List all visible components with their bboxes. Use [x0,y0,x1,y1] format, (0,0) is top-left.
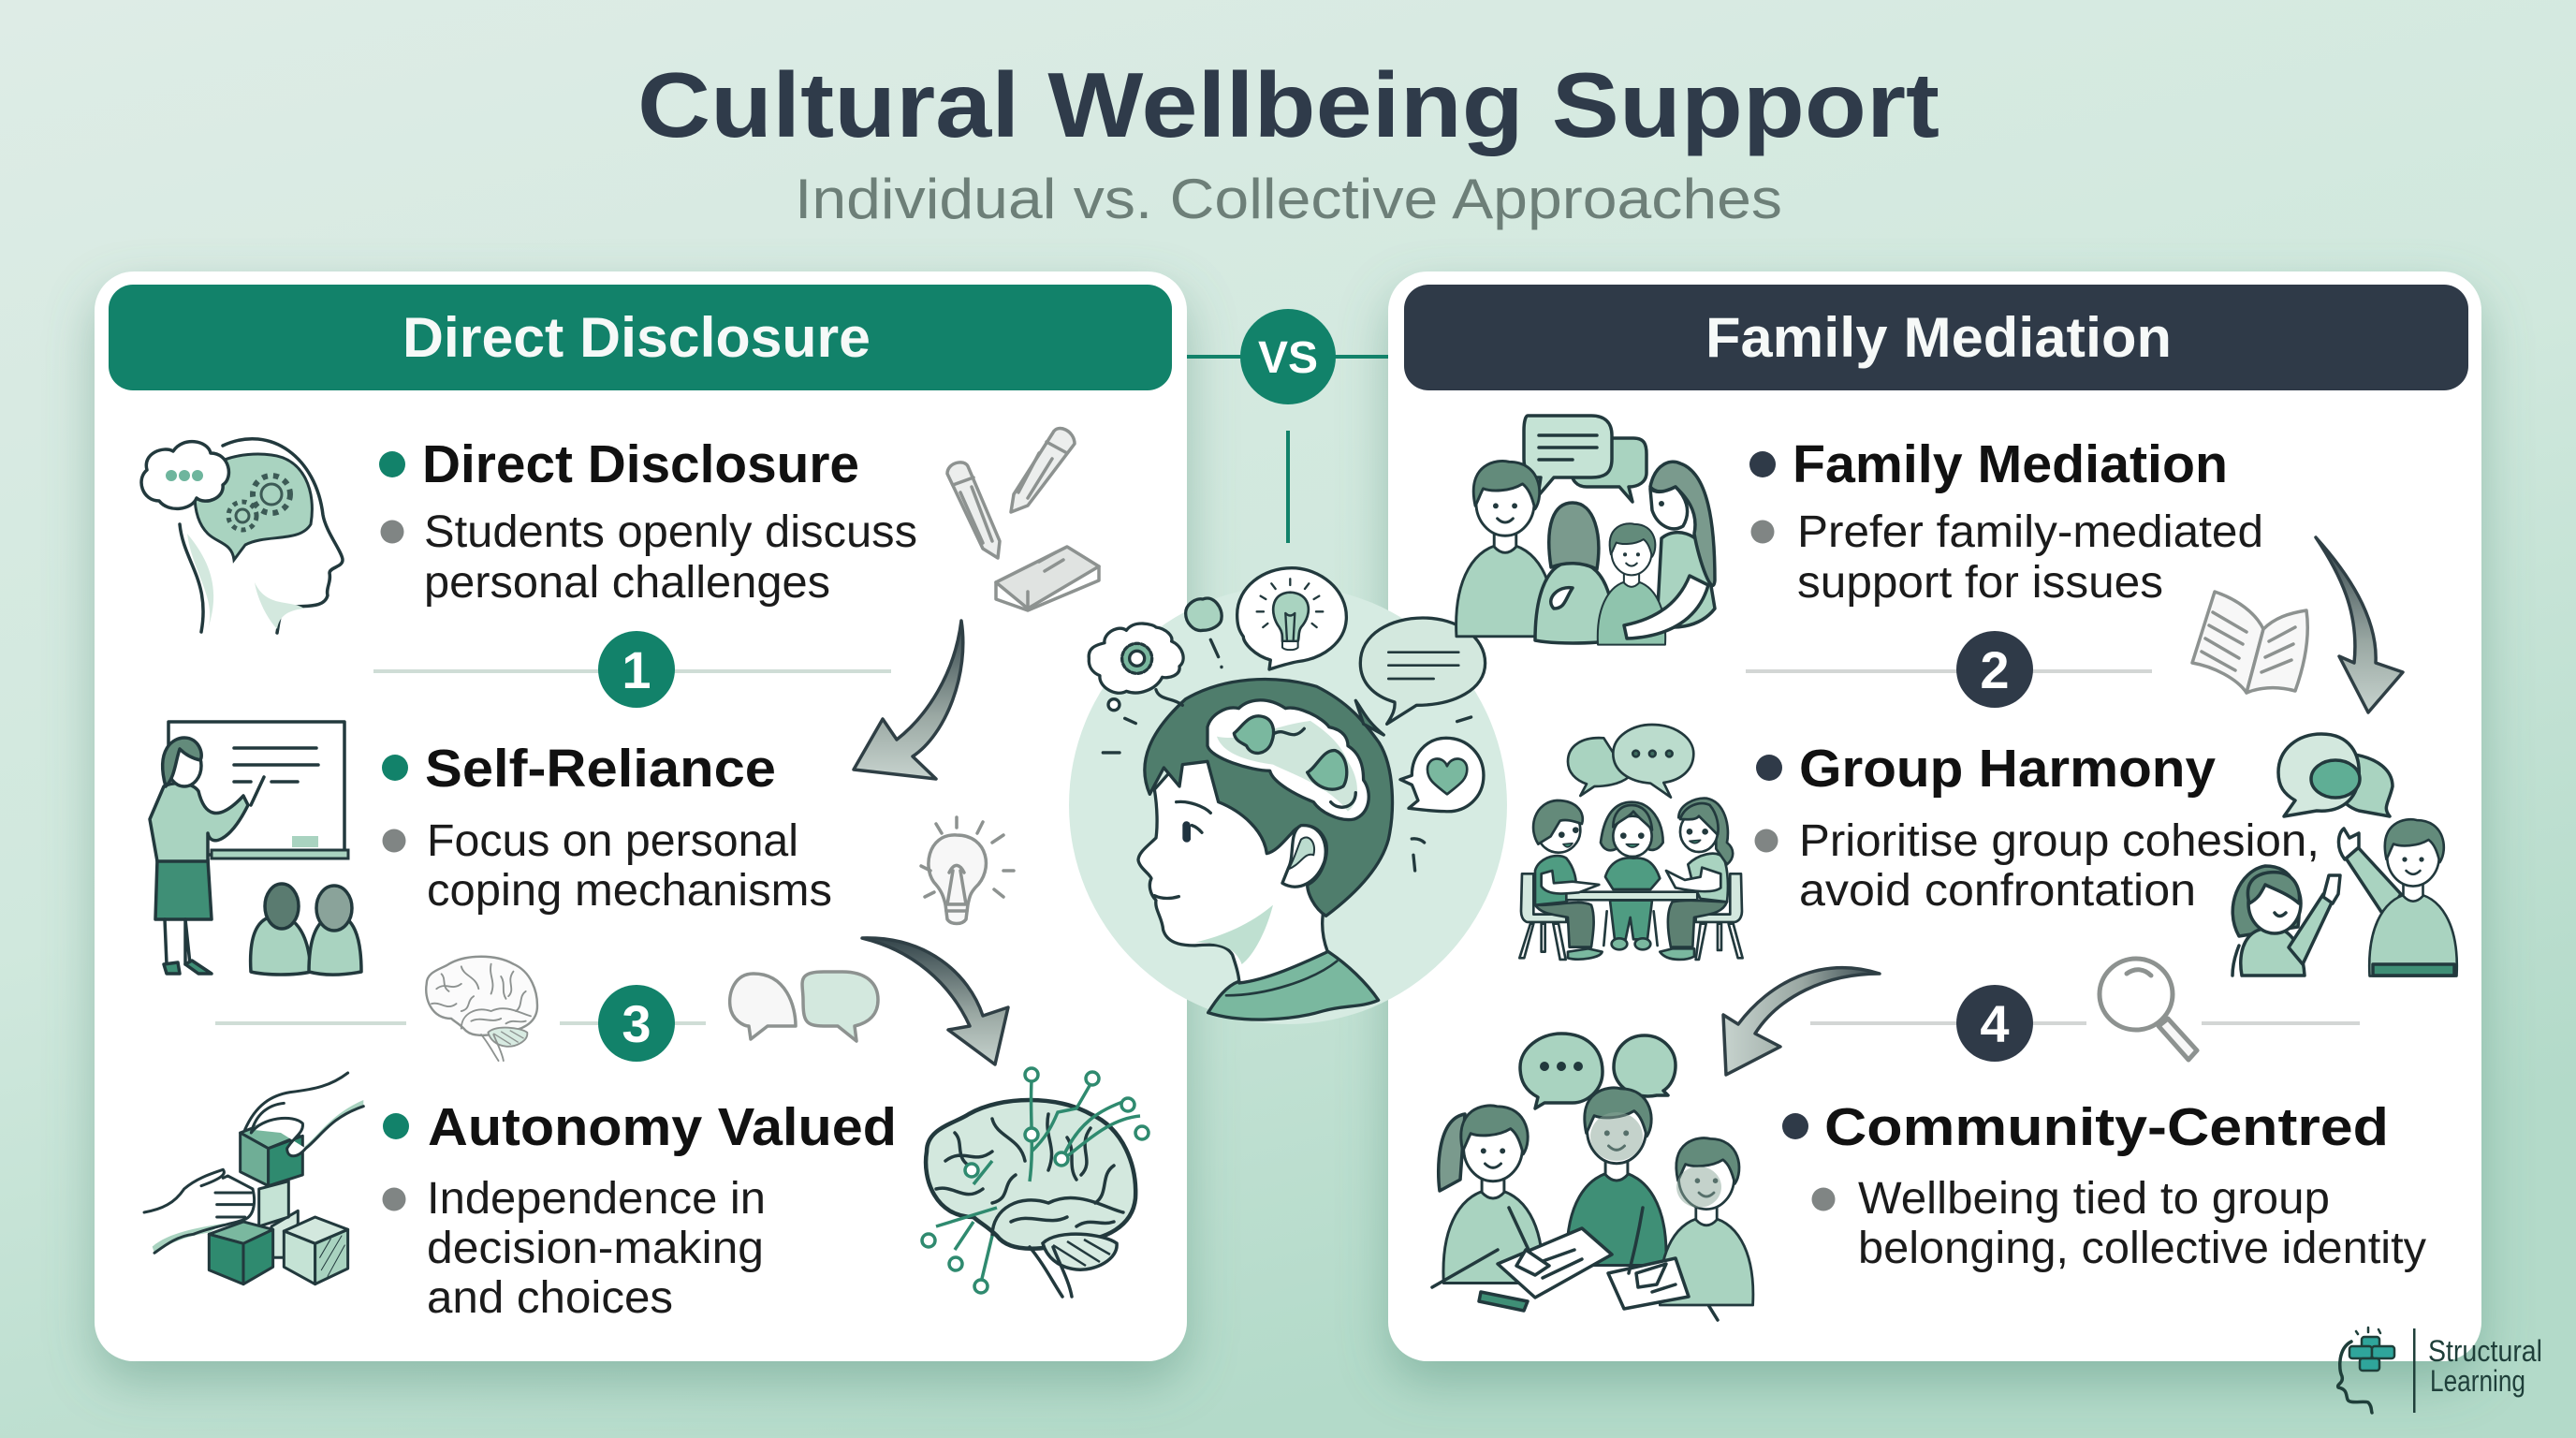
text block: autonomy valued: and choices [427,1273,673,1323]
arrow: family mediation to group harmony [2316,537,2403,712]
header label: direct disclosure: Direct Disclosure [402,306,871,369]
logo: structural learning: Learning [2430,1364,2525,1398]
text block: group harmony [1754,739,2320,916]
icon: grey speech bubbles [730,972,878,1041]
text block: autonomy valued: decision-making [427,1224,764,1273]
text block: direct disclosure: Direct Disclosure [422,434,859,494]
panel: family mediation [1388,271,2481,1361]
number badge 1: 1 [622,640,651,699]
icon: grey open book [2192,592,2307,693]
icon: grey lightbulb [921,817,1014,923]
vs badge [1240,309,1336,404]
text block: self-reliance: Focus on personal [427,816,798,866]
text block: direct disclosure: personal challenges [424,558,830,608]
arrow: group harmony to community-centred [1723,968,1880,1075]
icon: waving children [2232,819,2457,976]
centre illustration: student head with thoughts [1069,568,1507,1024]
text block: family mediation: Prefer family-mediated [1797,507,2263,557]
logo: structural learning [2338,1328,2542,1413]
text block: self-reliance: coping mechanisms [427,866,832,916]
title: Cultural Wellbeing Support [637,53,1939,156]
centre circle [1069,586,1507,1024]
text block: group harmony: Prioritise group cohesion, [1799,816,2320,866]
number badge 3 [598,985,675,1062]
number badge 4: 4 [1980,994,2010,1053]
header bar: direct disclosure [109,285,1172,390]
text block: family mediation: Family Mediation [1793,434,2228,494]
text block: family mediation: support for issues [1797,558,2163,608]
number badge 4 [1956,985,2033,1062]
dividers [215,671,2360,1023]
header label: family mediation: Family Mediation [1705,306,2172,369]
icon: head with thought cloud [141,439,343,633]
icon: family group [1456,416,1715,645]
text block: autonomy valued: Independence in [427,1174,766,1224]
text block: community-centred [1782,1097,2426,1273]
text block: self-reliance [382,739,832,916]
icon: overlapping speech bubbles [2278,734,2393,816]
number badge 1 [598,631,675,708]
icon: large brain with circuits [922,1068,1149,1297]
icon: children at table [1519,725,1743,960]
student [1089,568,1486,1020]
icon: small grey brain [426,957,537,1061]
header bar: family mediation [1404,285,2468,390]
number badge 2: 2 [1980,640,2010,699]
text block: autonomy valued: Autonomy Valued [428,1097,897,1157]
text block: autonomy valued [382,1097,897,1323]
icon: hands and blocks [144,1073,363,1284]
panel: direct disclosure [95,271,1187,1361]
text block: group harmony: avoid confrontation [1799,866,2196,916]
logo: structural learning: Structural [2428,1334,2542,1368]
number badge 3: 3 [622,994,651,1053]
text block: direct disclosure: Students openly discuss [424,507,917,557]
text block: community-centred: Wellbeing tied to group [1858,1174,2330,1224]
vs badge: VS [1258,333,1318,383]
text block: group harmony: Group Harmony [1799,739,2216,799]
text block: self-reliance: Self-Reliance [425,739,776,799]
text block: community-centred: Community-Centred [1824,1097,2389,1157]
icon: pencils and book [947,429,1099,610]
text block: family mediation [1749,434,2263,608]
icon: children studying together [1432,1034,1753,1320]
icon: teacher at whiteboard [150,722,361,975]
text block: community-centred: belonging, collective identity [1858,1224,2426,1273]
number badge 2 [1956,631,2033,708]
vs connector lines [1187,357,1388,543]
icon: magnifying glass [2100,959,2197,1060]
text block: direct disclosure [379,434,917,608]
arrow: self-reliance to autonomy [862,938,1008,1064]
arrow: disclosure to self-reliance [854,621,963,779]
subtitle: Individual vs. Collective Approaches [795,168,1782,230]
